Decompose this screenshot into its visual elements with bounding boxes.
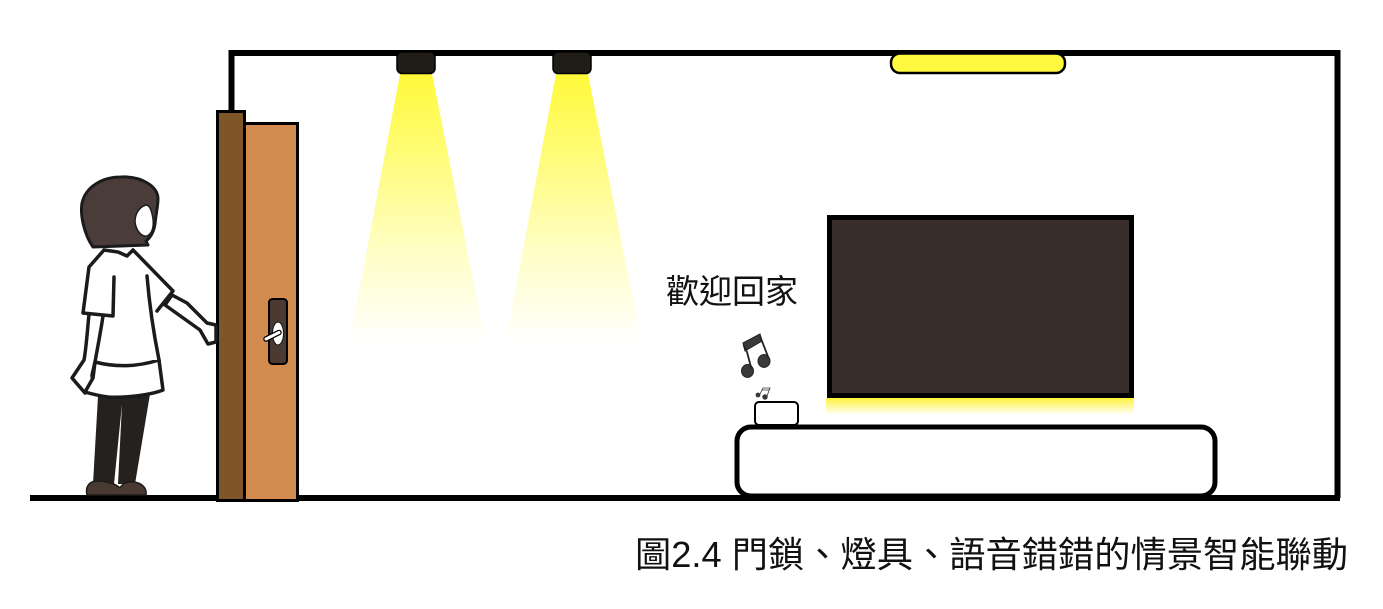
skirt bbox=[85, 360, 163, 397]
icon: large music note bbox=[742, 334, 770, 378]
icon: ceiling linear light bbox=[891, 54, 1065, 73]
room outline bbox=[30, 53, 1340, 501]
legs bbox=[93, 394, 150, 484]
icon: small music note bbox=[756, 388, 770, 399]
television bbox=[830, 218, 1132, 396]
left arm bbox=[72, 314, 103, 393]
light beam: right spotlight bbox=[505, 74, 642, 345]
TV cabinet bbox=[737, 427, 1215, 496]
greeting text: 歡迎回家 bbox=[666, 273, 798, 310]
door and frame bbox=[218, 112, 298, 500]
shirt bbox=[83, 250, 173, 360]
face bbox=[135, 205, 153, 236]
icon: smart door lock bbox=[266, 299, 287, 364]
right arm bbox=[165, 295, 216, 344]
hair bbox=[81, 177, 158, 247]
smart speaker bbox=[755, 402, 798, 425]
icon: left ceiling spotlight bbox=[397, 52, 435, 74]
shoes bbox=[87, 481, 146, 495]
person at the door bbox=[72, 177, 216, 495]
TV backlight glow bbox=[826, 398, 1134, 415]
caption: 圖2.4 門鎖、燈具、語音錯錯的情景智能聯動 bbox=[635, 534, 1348, 575]
light beam: left spotlight bbox=[349, 74, 486, 345]
icon: right ceiling spotlight bbox=[553, 52, 591, 74]
